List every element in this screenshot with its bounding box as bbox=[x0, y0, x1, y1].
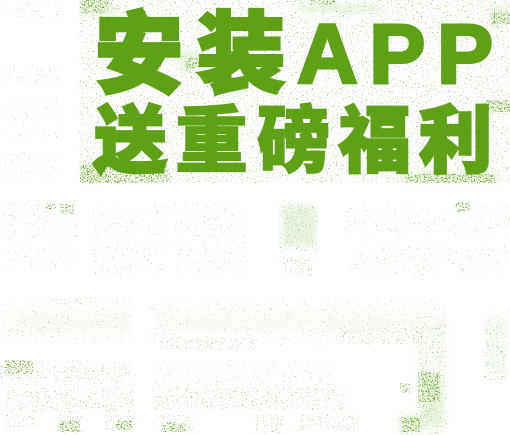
title line 2: send big benefits: 磅 bbox=[257, 101, 330, 182]
speckled text block: upper rows bbox=[2, 200, 510, 276]
title line 1: install APP: APP bbox=[297, 7, 493, 101]
title line 2: send big benefits: 利 bbox=[419, 101, 492, 182]
title line 1: install APP bbox=[95, 5, 493, 104]
speckled left column bbox=[3, 0, 59, 182]
title line 2: send big benefits bbox=[93, 101, 492, 182]
title line 1: install APP: 装 bbox=[197, 5, 285, 104]
title line 2: send big benefits: 福 bbox=[338, 101, 411, 182]
speckled text block: lower rows bbox=[0, 297, 510, 435]
speckled panel behind title bbox=[79, 0, 510, 183]
title line 2: send big benefits: 重 bbox=[175, 101, 248, 182]
title line 2: send big benefits: 送 bbox=[93, 101, 167, 182]
title line 1: install APP: 安 bbox=[95, 5, 183, 104]
